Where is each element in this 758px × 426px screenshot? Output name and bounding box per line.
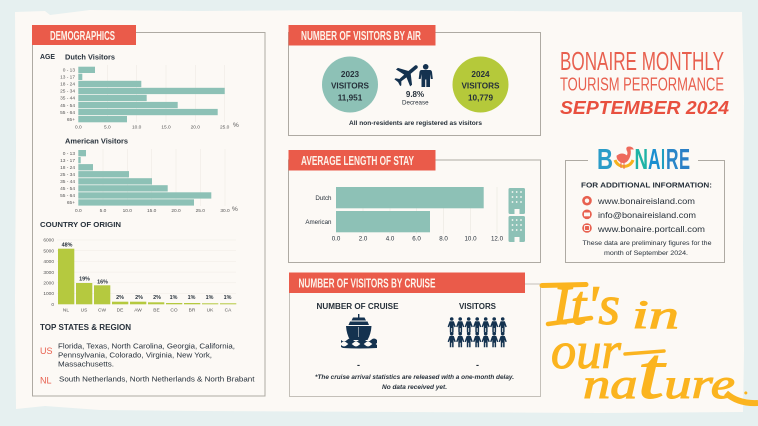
text: us states: US — [40, 346, 53, 356]
chart: country of origin: NL — [63, 308, 69, 314]
chart: dutch visitors age — [60, 65, 239, 130]
chart: american visitors age: 18 - 24 — [60, 165, 75, 171]
chart: country of origin: CA — [225, 308, 232, 314]
chart: length of stay: 10.0 — [464, 236, 477, 243]
chart: country of origin: 1000 — [43, 291, 54, 297]
chart: country of origin: US — [81, 308, 87, 314]
heading: number of visitors by cruise: NUMBER OF VISITORS BY CRUISE — [298, 277, 436, 291]
chart: country of origin: 4000 — [43, 259, 54, 265]
chart: country of origin: 2% — [135, 295, 143, 301]
text: us states: Pennsylvania, Colorado, Virginia, New York, — [58, 352, 212, 360]
chart: country of origin: 1% — [224, 295, 232, 301]
panel: average length of stay — [288, 150, 540, 262]
chart: dutch visitors age: 5.0 — [104, 124, 111, 130]
chart: length of stay: 4.0 — [386, 236, 395, 243]
note: cruise data delay: No data received yet. — [382, 385, 447, 391]
title: SEPTEMBER 2024 — [560, 98, 729, 118]
panel: additional information — [566, 144, 724, 262]
chart: country of origin — [43, 238, 236, 314]
logo: bonaire: I — [661, 144, 665, 176]
logo: bonaire: A — [648, 144, 661, 176]
stat: 2024 visitors: 10,779 — [468, 94, 493, 102]
logo: bonaire: N — [634, 144, 648, 176]
title — [560, 46, 729, 118]
slogan: it's in our nature — [542, 275, 758, 415]
chart: length of stay: 0.0 — [332, 236, 341, 243]
chart: length of stay: Dutch — [315, 195, 332, 202]
heading: country of origin: COUNTRY OF ORIGIN — [40, 220, 121, 229]
chart: country of origin: AW — [134, 308, 142, 314]
text: netherlands regions: South Netherlands, North Netherlands & North Brabant — [59, 376, 255, 384]
label: dutch visitors: Dutch Visitors — [65, 52, 115, 62]
icon: hotel building top — [508, 188, 525, 214]
logo: bonaire: E — [679, 144, 690, 176]
label: age: AGE — [40, 52, 55, 61]
heading: demographics: DEMOGRAPHICS — [50, 29, 115, 43]
chart: dutch visitors age: 20.0 — [191, 124, 200, 130]
chart: country of origin: 3000 — [43, 270, 54, 276]
slogan: it's in our nature: It's — [551, 275, 620, 337]
chart: american visitors age: 65+ — [67, 200, 75, 206]
chart: country of origin: 1% — [188, 295, 196, 301]
value: cruise visitors: - — [476, 360, 479, 370]
chart: dutch visitors age: 25.0 — [220, 124, 230, 130]
heading: number of visitors by cruise — [289, 272, 525, 293]
chart: dutch visitors age: 65+ — [67, 117, 75, 123]
heading: average length of stay: AVERAGE LENGTH OF STAY — [301, 154, 414, 168]
heading: demographics — [32, 25, 136, 45]
chart: american visitors age: 20.0 — [171, 208, 181, 214]
chart: country of origin: 1% — [170, 295, 178, 301]
contact: email — [582, 210, 696, 220]
stat: 2023 visitors: VISITORS — [331, 82, 370, 90]
chart: dutch visitors age: % — [233, 122, 239, 129]
note: cruise data delay: *The cruise arrival statistics are released with a one-month delay. — [315, 375, 514, 381]
stat: decrease: 9.8% — [406, 90, 424, 99]
chart: american visitors age: 13 - 17 — [60, 158, 75, 164]
chart: country of origin: CO — [170, 308, 178, 314]
heading: number of visitors by air — [288, 25, 436, 46]
stat: 2024 visitors — [452, 56, 508, 112]
text: netherlands regions — [40, 376, 255, 386]
text: netherlands regions: NL — [40, 376, 52, 386]
chart: american visitors age: 45 - 54 — [60, 186, 75, 192]
chart: american visitors age: 10.0 — [123, 208, 132, 214]
heading: for additional information: FOR ADDITIONAL INFORMATION: — [581, 181, 712, 190]
chart: dutch visitors age: 35 - 44 — [60, 96, 75, 102]
chart: country of origin: 5000 — [43, 248, 54, 254]
logo: bonaire: B — [597, 144, 613, 176]
chart: country of origin: DE — [117, 308, 123, 314]
contact: email: info@bonaireisland.com — [598, 211, 696, 220]
chart: american visitors age: 0 - 13 — [63, 151, 75, 157]
chart: country of origin: 0 — [51, 302, 54, 308]
chart: country of origin: 2% — [153, 295, 161, 301]
value: cruise count: - — [357, 360, 360, 370]
chart: american visitors age: 30.0 — [220, 208, 230, 214]
icon: person — [419, 64, 433, 87]
note: preliminary figures: These data are preliminary figures for the — [582, 240, 712, 247]
chart: dutch visitors age: 18 - 24 — [60, 82, 75, 88]
chart: length of stay — [305, 187, 504, 243]
chart: american visitors age: % — [232, 206, 238, 213]
chart: length of stay: American — [305, 219, 332, 226]
chart: american visitors age: 5.0 — [100, 208, 107, 214]
stat: decrease — [402, 90, 429, 106]
chart: dutch visitors age: 0.0 — [75, 124, 82, 130]
chart: american visitors age: 25.0 — [196, 208, 205, 214]
heading: average length of stay — [288, 150, 436, 170]
text: us states — [40, 344, 235, 368]
slogan: it's in our nature: nature — [583, 333, 735, 415]
chart: dutch visitors age: 45 - 54 — [60, 103, 75, 109]
heading: number of visitors by air: NUMBER OF VISITORS BY AIR — [301, 29, 421, 43]
note: cruise data delay — [315, 375, 514, 391]
logo: bonaire — [597, 144, 690, 176]
panel: visitors by cruise — [289, 272, 540, 396]
chart: american visitors age: 35 - 44 — [60, 179, 75, 185]
chart: american visitors age: 25 - 34 — [60, 172, 75, 178]
text: us states: Massachusetts. — [58, 362, 114, 368]
chart: length of stay: 6.0 — [412, 236, 421, 243]
slogan: it's in our nature: in — [632, 292, 679, 337]
chart: dutch visitors age: 0 - 13 — [63, 68, 75, 74]
chart: dutch visitors age: 10.0 — [132, 124, 142, 130]
label: visitors: VISITORS — [459, 302, 497, 311]
chart: american visitors age: 0.0 — [75, 208, 82, 214]
chart: american visitors age: 55 - 64 — [60, 193, 75, 199]
stat: 2023 visitors — [322, 56, 378, 112]
text: us states: Florida, Texas, North Carolina, Georgia, California, — [58, 344, 235, 350]
panel: demographics — [32, 25, 265, 396]
chart: length of stay: 12.0 — [491, 236, 504, 243]
note: preliminary figures — [582, 240, 712, 257]
contact: port call — [582, 223, 705, 234]
chart: length of stay: 2.0 — [359, 236, 368, 243]
contact: website: www.bonaireisland.com — [597, 197, 695, 206]
contact: website — [582, 196, 695, 206]
chart: dutch visitors age: 15.0 — [161, 124, 171, 130]
chart: country of origin: CW — [98, 308, 106, 314]
chart: american visitors age — [60, 149, 238, 214]
chart: country of origin: 2000 — [43, 280, 54, 286]
chart: country of origin: BR — [189, 308, 196, 314]
chart: country of origin: 19% — [79, 276, 90, 282]
chart: country of origin: UK — [207, 308, 214, 314]
chart: american visitors age: 15.0 — [147, 208, 157, 214]
chart: country of origin: 1% — [206, 295, 214, 301]
stat: decrease: Decrease — [402, 100, 429, 106]
chart: dutch visitors age: 13 - 17 — [60, 75, 75, 81]
chart: dutch visitors age: 25 - 34 — [60, 89, 75, 95]
logo: bonaire: R — [666, 144, 679, 176]
stat: 2023 visitors: 2023 — [341, 70, 360, 79]
stat: 2023 visitors: 11,951 — [338, 94, 363, 102]
stat: 2024 visitors: VISITORS — [461, 82, 500, 90]
icon: plane — [390, 57, 424, 91]
slogan: it's in our nature: . — [744, 378, 748, 398]
chart: country of origin: BE — [153, 308, 160, 314]
chart: country of origin: 6000 — [43, 238, 54, 244]
chart: dutch visitors age: 55 - 64 — [60, 110, 75, 116]
note: preliminary figures: month of September 2024. — [604, 250, 688, 257]
icon: cruise ship — [341, 314, 377, 348]
chart: country of origin: 16% — [97, 280, 108, 286]
contact: port call: www.bonaire.portcall.com — [597, 225, 705, 234]
chart: length of stay: 8.0 — [439, 236, 448, 243]
stat: 2024 visitors: 2024 — [471, 70, 490, 79]
note: non-residents: All non-residents are registered as visitors — [349, 121, 483, 127]
chart: country of origin: 2% — [116, 295, 124, 301]
label: american visitors: American Visitors — [65, 136, 128, 146]
heading: top states and region: TOP STATES & REGION — [40, 323, 131, 332]
icon: hotel building bottom — [508, 216, 525, 242]
label: number of cruise: NUMBER OF CRUISE — [316, 302, 399, 311]
panel: visitors by air — [288, 25, 540, 136]
icon: visitors group — [448, 317, 507, 347]
slogan: it's in our nature: our — [551, 323, 622, 380]
chart: country of origin: 48% — [62, 242, 73, 248]
